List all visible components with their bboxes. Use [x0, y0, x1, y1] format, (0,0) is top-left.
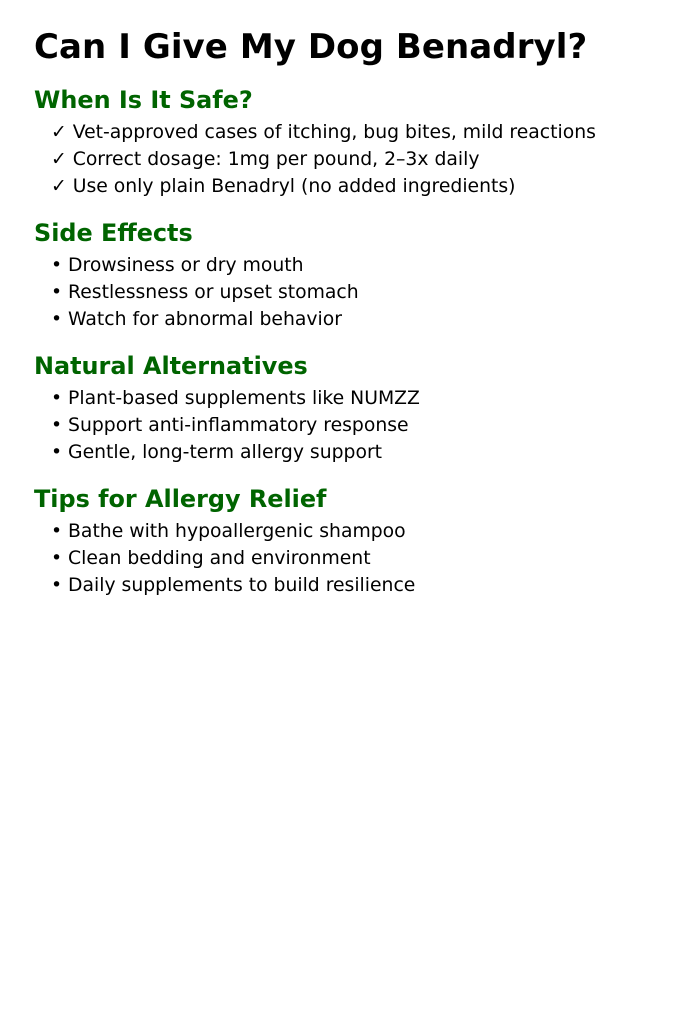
heading: when is it safe: When Is It Safe?	[34, 86, 253, 114]
heading: tips for allergy relief: Tips for Allergy Relief	[34, 485, 326, 513]
text block: natural alternatives	[51, 388, 420, 463]
text block: when is it safe: ✓ Correct dosage: 1mg per pound, 2–3x daily	[51, 149, 479, 170]
text block: natural alternatives: • Plant-based supplements like NUMZZ	[51, 388, 420, 409]
text block: when is it safe	[51, 122, 596, 197]
text block: side effects: • Restlessness or upset stomach	[51, 282, 359, 303]
heading: side effects: Side Effects	[34, 219, 193, 247]
text block: side effects: • Drowsiness or dry mouth	[51, 255, 304, 276]
text block: side effects: • Watch for abnormal behavior	[51, 309, 342, 330]
text block: when is it safe: ✓ Vet-approved cases of itching, bug bites, mild reactions	[51, 122, 596, 143]
text block: tips for allergy relief: • Daily supplements to build resilience	[51, 575, 415, 596]
text block: tips for allergy relief: • Clean bedding and environment	[51, 548, 371, 569]
text block: side effects	[51, 255, 359, 330]
text block: tips for allergy relief: • Bathe with hypoallergenic shampoo	[51, 521, 406, 542]
text block: tips for allergy relief	[51, 521, 415, 596]
text block: when is it safe: ✓ Use only plain Benadryl (no added ingredients)	[51, 176, 515, 197]
heading: natural alternatives: Natural Alternatives	[34, 352, 308, 380]
text block: natural alternatives: • Gentle, long-term allergy support	[51, 442, 382, 463]
title: Can I Give My Dog Benadryl?	[34, 27, 587, 67]
text block: natural alternatives: • Support anti-inflammatory response	[51, 415, 409, 436]
